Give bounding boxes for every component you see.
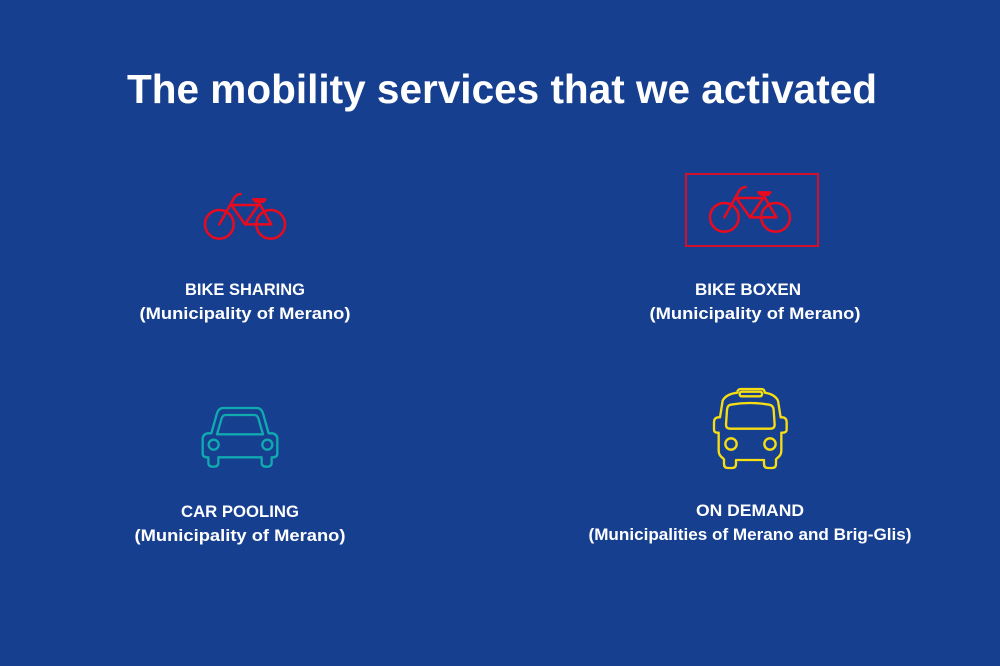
label: bike boxen: (Municipality of Merano)	[650, 304, 860, 323]
label: bike sharing	[140, 280, 350, 323]
label: bike sharing: BIKE SHARING	[185, 280, 305, 299]
label: bike boxen: BIKE BOXEN	[695, 280, 801, 299]
icon: car	[203, 408, 277, 467]
label: bike sharing: (Municipality of Merano)	[140, 304, 350, 323]
label: on demand	[588, 501, 912, 544]
icon: bike sharing bicycle	[205, 194, 285, 239]
service: bike sharing	[140, 194, 350, 323]
icon: bus	[714, 389, 787, 468]
label: car pooling: CAR POOLING	[181, 502, 299, 521]
service: on demand	[588, 389, 912, 544]
label: car pooling: (Municipality of Merano)	[134, 526, 346, 545]
label: on demand: (Municipalities of Merano and Brig-Glis)	[588, 525, 912, 544]
title: The mobility services that we activated	[127, 66, 877, 112]
label: car pooling	[134, 502, 346, 545]
service: bike boxen	[650, 174, 860, 323]
label: on demand: ON DEMAND	[696, 501, 804, 520]
label: bike boxen	[650, 280, 860, 323]
service: car pooling	[134, 408, 346, 545]
icon: bike boxen framed bicycle	[686, 174, 818, 246]
